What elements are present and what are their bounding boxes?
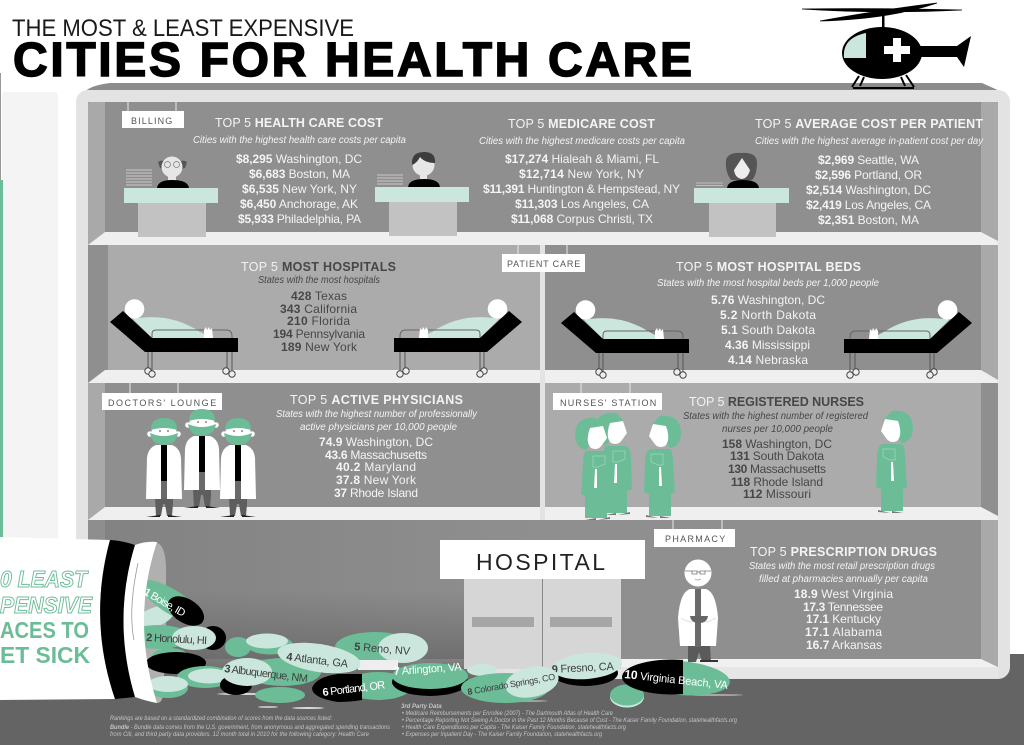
desk with clerk: woman bbox=[694, 153, 789, 237]
pill 10: Virginia Beach, VA bbox=[622, 660, 730, 696]
list: active physicians: 74.9 Washington, DC bbox=[319, 435, 433, 449]
subheading: filled at pharmacies annually per capita bbox=[759, 574, 928, 585]
heading: registered nurses: TOP 5 REGISTERED NURSES bbox=[689, 395, 864, 409]
pill bottle bbox=[0, 537, 157, 703]
sign: billing bbox=[122, 102, 184, 128]
footnotes: third party data: • Percentage Reporting Not Seeing A Doctor in the Past 12 Months Because of Cost - The Kaiser Family Foundation, statehealthfacts.org bbox=[402, 718, 738, 724]
icon: doctor 1 bbox=[146, 418, 182, 517]
floor shadow lines bbox=[217, 693, 743, 709]
subheading: Cities with the highest medicare costs per capita bbox=[479, 136, 685, 147]
roof bbox=[84, 83, 1002, 92]
list: most hospitals bbox=[273, 289, 365, 354]
list: medicare cost bbox=[483, 152, 680, 226]
panel: most hospitals bbox=[110, 260, 522, 377]
list: registered nurses: 131 South Dakota bbox=[730, 449, 824, 463]
pill 6: Portland, OR bbox=[312, 672, 412, 702]
list: registered nurses: 158 Washington, DC bbox=[722, 437, 832, 451]
subheading: States with the most hospitals bbox=[258, 275, 380, 286]
pill 6: Portland, OR: 6 Portland, OR bbox=[322, 679, 386, 699]
subheading: States with the highest number of professionally bbox=[276, 409, 478, 420]
list: medicare cost: $11,391 Huntington & Hempstead, NY bbox=[483, 182, 680, 196]
sign: nurses' station bbox=[553, 383, 662, 410]
list: registered nurses: 118 Rhode Island bbox=[731, 475, 823, 489]
pill 4: Atlanta, GA bbox=[275, 638, 363, 678]
subheading: Cities with the highest health care costs per capita bbox=[193, 135, 406, 146]
row 4 wall bbox=[60, 520, 998, 680]
list: average cost: $2,351 Boston, MA bbox=[818, 213, 919, 227]
sign: doctors' lounge: DOCTORS' LOUNGE bbox=[108, 398, 217, 408]
subheading: States with the most retail prescription drugs bbox=[749, 561, 935, 572]
footnotes: third party data: 3rd Party Data bbox=[401, 704, 442, 710]
panel: most hospital beds bbox=[561, 260, 972, 378]
subheading bbox=[683, 411, 868, 435]
row 2 wall bbox=[88, 245, 998, 383]
sign: hospital: HOSPITAL bbox=[476, 549, 605, 575]
list: health care cost: $6,450 Anchorage, AK bbox=[240, 197, 358, 211]
list: health care cost: $6,683 Boston, MA bbox=[249, 167, 350, 181]
sign: patient care: PATIENT CARE bbox=[507, 259, 581, 269]
pill 8: Colorado Springs, CO bbox=[461, 662, 562, 703]
icon: nurse 2 bbox=[595, 413, 632, 515]
hospital entrance bbox=[440, 540, 645, 669]
list: prescription drugs bbox=[794, 587, 893, 652]
heading: prescription drugs: TOP 5 PRESCRIPTION DRUGS bbox=[750, 545, 937, 559]
heading: average cost per patient: TOP 5 AVERAGE COST PER PATIENT bbox=[755, 117, 983, 131]
floor highlight bbox=[358, 660, 398, 670]
list: hospital beds: 5.1 South Dakota bbox=[721, 323, 815, 337]
footnotes: rankings and bundle: Rankings are based on a standardized combination of scores from the data sources listed: bbox=[110, 716, 332, 722]
icon: doctor 2 bbox=[184, 409, 220, 508]
sign: hospital bbox=[440, 540, 645, 579]
list: average cost: $2,419 Los Angeles, CA bbox=[806, 198, 931, 212]
panel: doctors' lounge bbox=[102, 383, 478, 517]
bottle rim bbox=[124, 542, 157, 703]
pill 9: Fresno, CA bbox=[551, 650, 623, 686]
title: CITIES FOR HEALTH CARE bbox=[13, 34, 692, 87]
icon: patient bed right bbox=[394, 299, 522, 377]
small pale pill bbox=[467, 664, 497, 676]
list: most hospitals: 428 Texas bbox=[291, 289, 347, 303]
panel: nurses' station bbox=[553, 383, 913, 520]
icon: patient bed right bbox=[844, 300, 972, 378]
pill 2: Honolulu, HI bbox=[126, 625, 226, 650]
panel: average cost per patient bbox=[694, 117, 984, 237]
pill 1: Boise, ID bbox=[134, 572, 210, 632]
list: most hospitals: 189 New York bbox=[281, 340, 358, 354]
list: prescription drugs: 17.1 Alabama bbox=[805, 625, 882, 639]
sign: billing: BILLING bbox=[131, 116, 173, 126]
heading: active physicians: TOP 5 ACTIVE PHYSICIANS bbox=[290, 393, 463, 407]
pill 3: Albuquerque, NM bbox=[177, 658, 321, 695]
sign: pharmacy bbox=[654, 520, 735, 547]
bottle interior bbox=[130, 542, 166, 703]
sign: nurses' station: NURSES' STATION bbox=[560, 398, 657, 408]
panel: pharmacy bbox=[654, 520, 937, 662]
footnotes: rankings and bundle: Bundle - Bundle data comes from the U.S. government, from anonymous and aggregated spending transactions bbox=[110, 725, 390, 731]
hospital building bbox=[60, 83, 1010, 680]
list: registered nurses bbox=[722, 437, 832, 501]
heading: medicare cost: TOP 5 MEDICARE COST bbox=[508, 117, 655, 131]
bottle text: PENSIVE bbox=[0, 592, 93, 618]
subheading bbox=[749, 561, 935, 585]
sign: doctors' lounge bbox=[102, 383, 222, 410]
subheading: nurses per 10,000 people bbox=[722, 424, 833, 435]
bottle text bbox=[0, 566, 93, 668]
footnotes: third party data bbox=[401, 704, 738, 738]
icon: helicopter bbox=[802, 3, 971, 88]
bottle text: ACES TO bbox=[0, 617, 89, 643]
subheading: Cities with the highest average in-patient cost per day bbox=[755, 136, 984, 147]
list: health care cost bbox=[236, 152, 362, 226]
list: hospital beds: 5.2 North Dakota bbox=[720, 308, 816, 322]
doors bbox=[464, 579, 621, 669]
ground bbox=[0, 654, 1024, 745]
heading: health care cost: TOP 5 HEALTH CARE COST bbox=[215, 116, 383, 130]
list: active physicians: 43.6 Massachusetts bbox=[325, 448, 427, 462]
icon: patient bed left bbox=[561, 300, 689, 378]
pill 4: Atlanta, GA: 4 Atlanta, GA bbox=[286, 651, 349, 671]
list: prescription drugs: 16.7 Arkansas bbox=[806, 638, 882, 652]
list: medicare cost: $11,303 Los Angeles, CA bbox=[515, 197, 649, 211]
list: average cost: $2,514 Washington, DC bbox=[806, 183, 931, 197]
footnotes: third party data: • Health Care Expenditures per Capita - The Kaiser Family Foundation, statehealthfacts.org bbox=[402, 725, 627, 731]
list: hospital beds: 4.14 Nebraska bbox=[728, 353, 808, 367]
icon: pharmacist bbox=[678, 560, 718, 662]
list: average cost: $2,969 Seattle, WA bbox=[818, 153, 919, 167]
list: prescription drugs: 18.9 West Virginia bbox=[794, 587, 893, 601]
icon: patient bed left bbox=[110, 299, 238, 377]
list: most hospitals: 343 California bbox=[280, 302, 357, 316]
list: medicare cost: $11,068 Corpus Christi, TX bbox=[511, 212, 653, 226]
icon: doctor 3 bbox=[220, 418, 256, 517]
pill: lower green bbox=[148, 676, 188, 698]
sign: pharmacy: PHARMACY bbox=[665, 534, 726, 544]
pills: spilled from bottle bbox=[126, 572, 731, 708]
pill 5: Reno, NV bbox=[335, 632, 428, 663]
sign: patient care bbox=[502, 245, 585, 272]
pill: small green bbox=[610, 684, 644, 708]
list: most hospitals: 210 Florida bbox=[287, 314, 350, 328]
pill 1: Boise, ID: 1 Boise, ID bbox=[142, 586, 187, 620]
list: registered nurses: 130 Massachusetts bbox=[728, 462, 826, 476]
left background panel bbox=[2, 92, 58, 542]
list: active physicians bbox=[319, 435, 433, 500]
icon: nurse 1 bbox=[575, 418, 612, 520]
pill 8: Colorado Springs, CO: 8 Colorado Springs, CO bbox=[467, 672, 556, 697]
footnotes: third party data: • Expenses per Inpatient Day - The Kaiser Family Foundation, statehealthfacts.org bbox=[402, 732, 603, 738]
list: active physicians: 37.8 New York bbox=[336, 473, 417, 487]
pill 5: Reno, NV: 5 Reno, NV bbox=[354, 641, 411, 658]
list: registered nurses: 112 Missouri bbox=[743, 487, 811, 501]
heading: most hospital beds: TOP 5 MOST HOSPITAL BEDS bbox=[676, 260, 861, 274]
building frame bbox=[76, 90, 1010, 679]
desk with clerk: dark-haired man bbox=[375, 152, 469, 236]
icon: nurse 3 bbox=[644, 416, 681, 518]
pill 10: Virginia Beach, VA: 10 Virginia Beach, VA bbox=[624, 667, 729, 692]
list: active physicians: 37 Rhode Island bbox=[334, 486, 418, 500]
list: most hospitals: 194 Pennsylvania bbox=[273, 327, 365, 341]
list: health care cost: $8,295 Washington, DC bbox=[236, 152, 362, 166]
pill 2: Honolulu, HI: 2 Honolulu, HI bbox=[146, 632, 207, 647]
list: prescription drugs: 17.1 Kentucky bbox=[806, 612, 881, 626]
panel: billing bbox=[122, 102, 406, 237]
subheading: States with the most hospital beds per 1,000 people bbox=[657, 278, 879, 289]
bottle text: ET SICK bbox=[0, 642, 90, 668]
subheading: active physicians per 10,000 people bbox=[300, 422, 457, 433]
bottle body bbox=[0, 537, 115, 700]
list: prescription drugs: 17.3 Tennessee bbox=[803, 600, 883, 614]
list: average cost bbox=[806, 153, 931, 227]
list: hospital beds bbox=[711, 293, 825, 367]
pale pill bbox=[133, 601, 177, 633]
desk with clerk: bald man bbox=[124, 156, 218, 237]
hidden edge of pill bottle bbox=[0, 73, 3, 540]
subheading: States with the highest number of registered bbox=[683, 411, 868, 422]
icon: nurse 4 bbox=[876, 411, 913, 513]
panel: medicare cost bbox=[375, 117, 685, 236]
title: THE MOST & LEAST EXPENSIVE bbox=[12, 15, 354, 42]
row 3 wall bbox=[88, 383, 998, 520]
list: active physicians: 40.2 Maryland bbox=[336, 460, 416, 474]
list: health care cost: $6,535 New York, NY bbox=[242, 182, 357, 196]
list: hospital beds: 4.36 Mississippi bbox=[725, 338, 810, 352]
footnotes: rankings and bundle bbox=[110, 716, 390, 738]
pill: green back bbox=[146, 634, 305, 703]
list: medicare cost: $17,274 Hialeah & Miami, FL bbox=[505, 152, 659, 166]
list: health care cost: $5,933 Philadelphia, PA bbox=[238, 212, 361, 226]
list: hospital beds: 5.76 Washington, DC bbox=[711, 293, 825, 307]
heading: most hospitals: TOP 5 MOST HOSPITALS bbox=[241, 260, 396, 274]
footnotes: rankings and bundle: from Citi, and third party data providers. 12 month total in 2010 for the following category: Health Care bbox=[110, 732, 370, 738]
footnotes: third party data: • Medicare Reimbursements per Enrollee (2007) - The Dartmouth Atlas of Health Care bbox=[402, 711, 614, 717]
bottle text: 0 LEAST bbox=[0, 566, 89, 592]
pill 7: Arlington, VA bbox=[392, 661, 468, 696]
pill 7: Arlington, VA: 7 Arlington, VA bbox=[393, 661, 463, 678]
list: average cost: $2,596 Portland, OR bbox=[815, 168, 922, 182]
row 1 wall bbox=[88, 102, 998, 245]
list: medicare cost: $12,714 New York, NY bbox=[519, 167, 644, 181]
black band bbox=[100, 540, 135, 699]
subheading bbox=[276, 409, 478, 433]
pill 9: Fresno, CA: 9 Fresno, CA bbox=[552, 661, 615, 676]
pill 3: Albuquerque, NM: 3 Albuquerque, NM bbox=[224, 663, 308, 685]
